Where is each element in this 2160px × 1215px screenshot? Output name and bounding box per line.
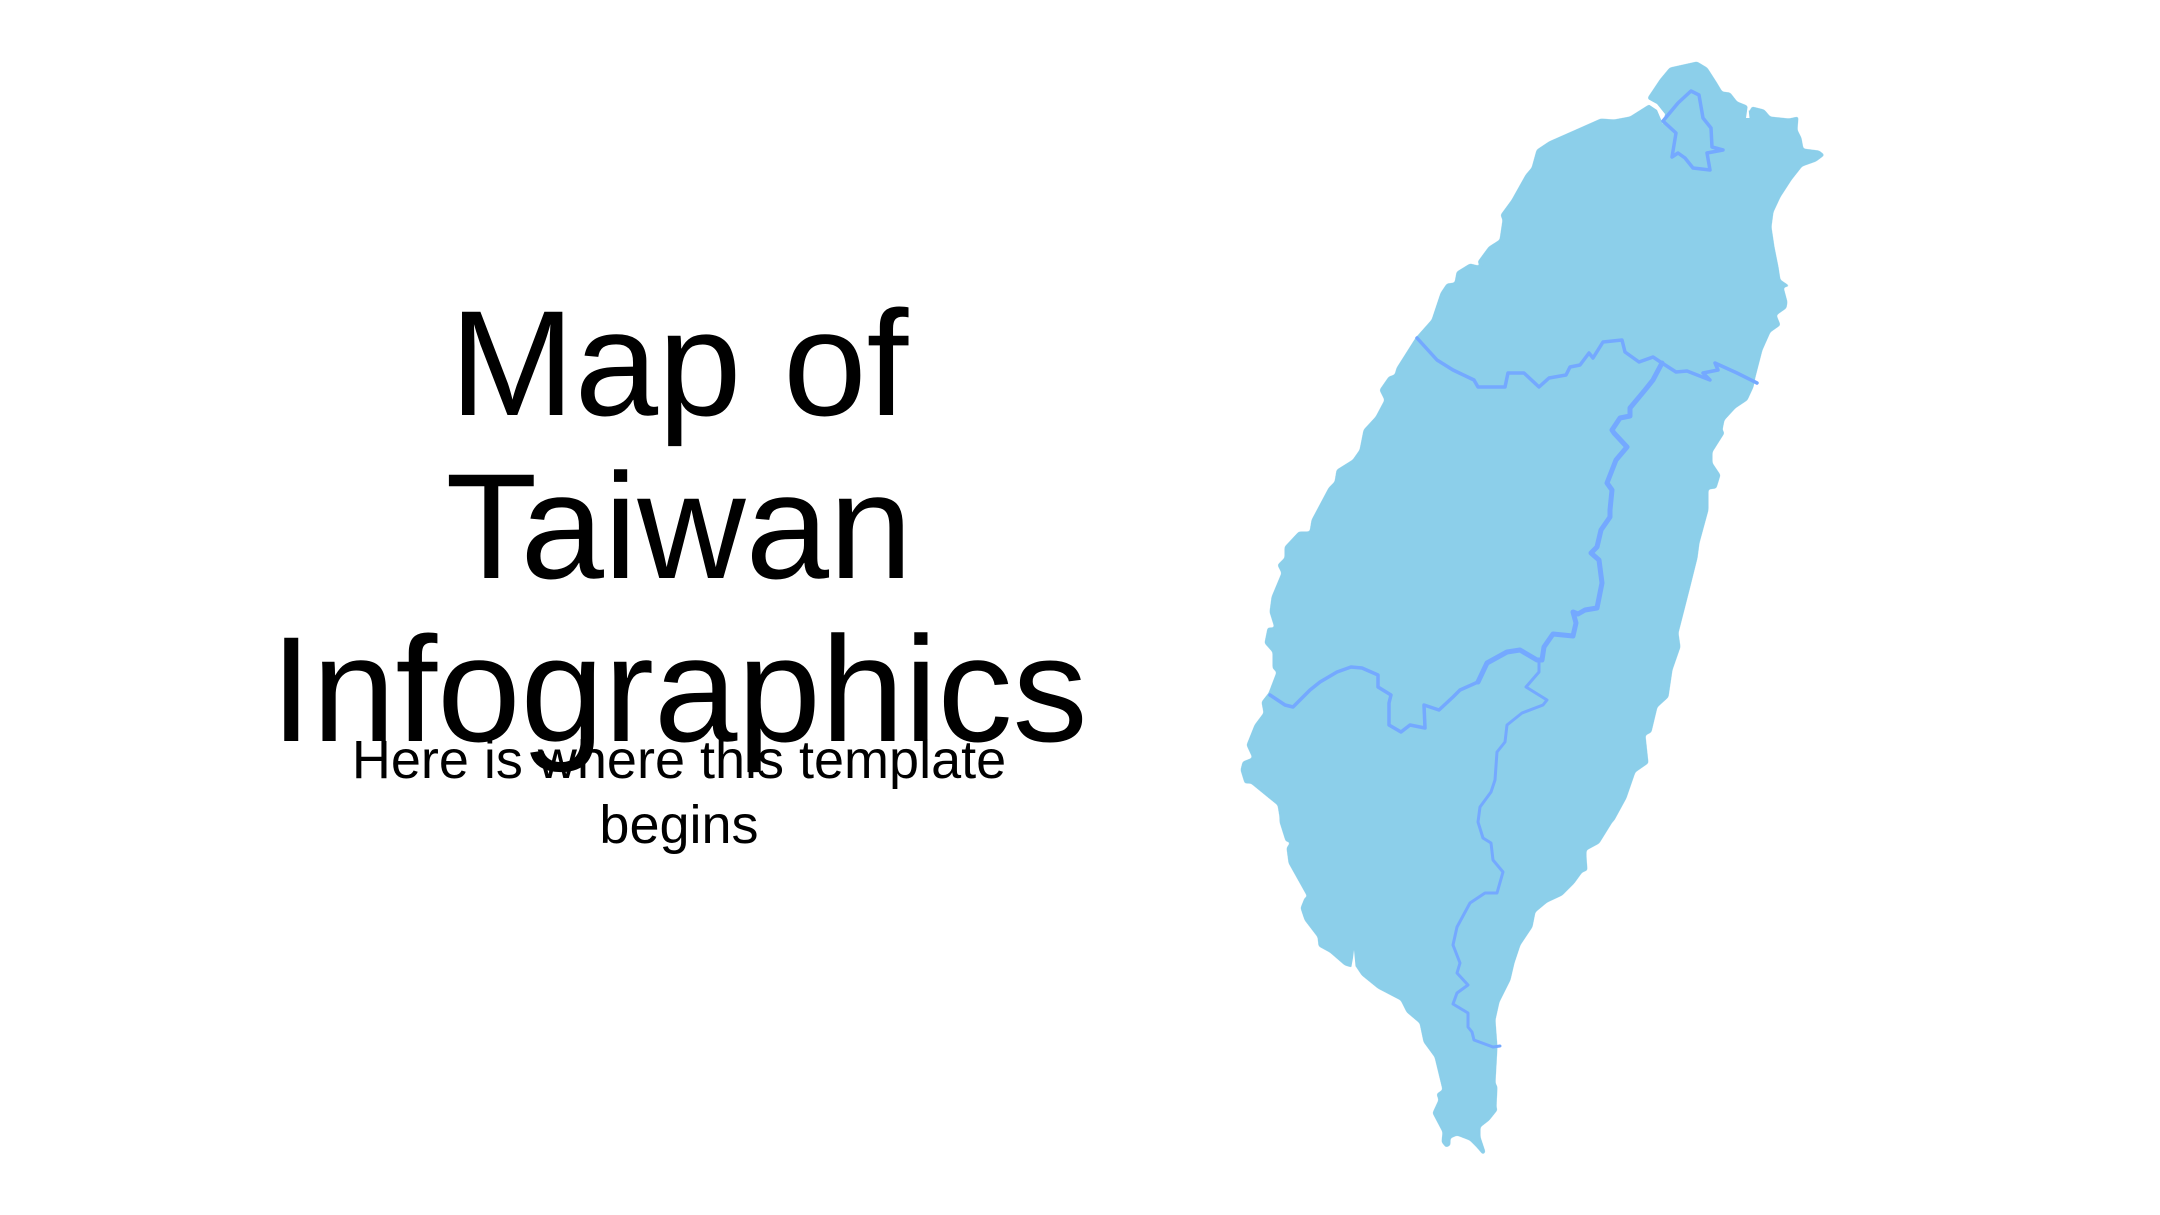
title: Map of [450,279,909,447]
northern boundary loop [1663,91,1723,170]
title: Taiwan [446,442,912,610]
central boundary [1478,363,1662,682]
subtitle: Here is where this template [352,730,1006,790]
island landmass [1241,62,1824,1154]
central boundary, western part [1270,667,1478,732]
map of Taiwan [1241,62,1824,1154]
subtitle: begins [599,795,759,855]
title: Infographics [270,605,1088,773]
northern horizontal boundary [1417,338,1757,387]
southern boundary [1453,662,1547,1047]
